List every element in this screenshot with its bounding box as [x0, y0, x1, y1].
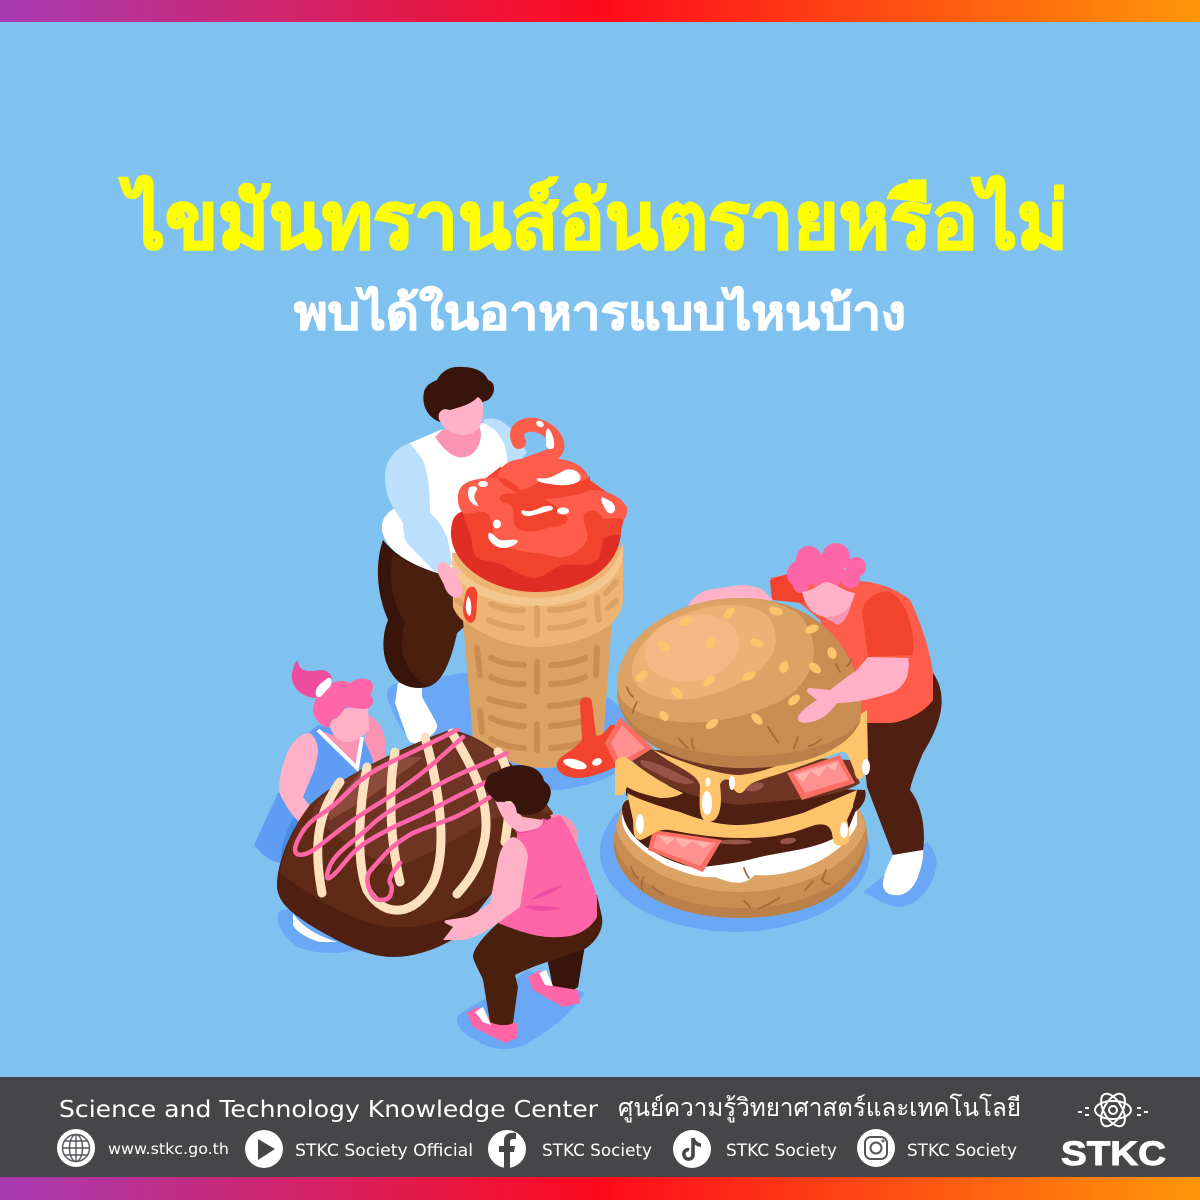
title: ไขมันทรานส์อันตรายหรือไม่: [119, 175, 1068, 265]
ice cream swirl tail: [517, 425, 557, 467]
brownie top: [313, 732, 553, 865]
organisation name English: Science and Technology Knowledge Center: [59, 1097, 599, 1123]
shirt: [770, 575, 933, 723]
shoe: [883, 850, 923, 895]
white sauce: [622, 810, 857, 883]
patty highlights: [640, 760, 796, 845]
logo wordmark: STKC: [1061, 1135, 1166, 1173]
footer panel: [0, 1077, 1200, 1177]
top bun: [617, 598, 861, 768]
ice cream top layer: [458, 457, 627, 557]
person: man behind ice cream: [378, 367, 527, 743]
dress: [290, 725, 375, 810]
organisation name Thai: ศูนย์ความรู้วิทยาศาสตร์และเทคโนโลยี: [618, 1093, 1021, 1123]
icon: facebook: [488, 1130, 526, 1168]
cone body: [463, 620, 612, 768]
ice cream swirl shading: [498, 476, 590, 531]
Facebook label: STKC Society: [542, 1141, 652, 1160]
hair: [313, 679, 373, 728]
icon: tiktok: [673, 1130, 711, 1168]
ponytail: [292, 660, 332, 698]
front shoe: [467, 1007, 517, 1043]
trousers: [860, 673, 942, 855]
hair: [787, 543, 866, 593]
sauce drip on cone: [463, 587, 477, 623]
shirt shading: [862, 592, 913, 657]
face: [328, 705, 369, 742]
face: [439, 397, 483, 435]
lower cheese: [627, 790, 857, 846]
subtitle: พบได้ในอาหารแบบไหนบ้าง: [294, 285, 906, 339]
face: [495, 800, 543, 832]
scrunchie: [316, 678, 332, 697]
cone rim highlight: [452, 540, 623, 606]
neck: [815, 598, 853, 625]
hair: [423, 367, 494, 422]
logo atom mark: [1078, 1090, 1148, 1130]
sesame seeds: [634, 605, 838, 731]
STKC logo: [1061, 1090, 1166, 1173]
website: www.stkc.go.th: [108, 1140, 229, 1158]
shoe: [395, 683, 437, 743]
arm: [443, 837, 528, 940]
icon: instagram: [857, 1129, 895, 1167]
chest: [318, 730, 362, 768]
bacon: [605, 717, 855, 872]
back leg: [547, 945, 585, 991]
Instagram label: STKC Society: [907, 1141, 1017, 1160]
trousers: [473, 895, 602, 1025]
arm: [279, 733, 318, 823]
top patty: [628, 749, 860, 805]
upper patty: [626, 775, 866, 828]
upper cheese left: [615, 757, 683, 798]
woman with burger (behind bun): [688, 543, 942, 895]
trousers: [378, 540, 470, 688]
icon: globe: [57, 1129, 95, 1167]
ice cream middle layer: [458, 467, 627, 578]
top gradient bar: [0, 0, 1200, 22]
white shirt: [382, 423, 520, 575]
melted sauce puddle: [557, 697, 625, 778]
TikTok label: STKC Society: [726, 1141, 837, 1160]
back shoe: [528, 970, 580, 1007]
ice cream base: [451, 505, 621, 592]
skirt: [254, 790, 330, 864]
bun grain marks: [627, 659, 851, 909]
pink shirt: [498, 815, 597, 937]
neck: [435, 424, 481, 457]
person: woman carrying brownie: [443, 765, 602, 1043]
waffle marks: [457, 582, 616, 635]
giant burger: [605, 598, 909, 918]
ice cream highlights: [468, 419, 615, 548]
back arm: [688, 585, 773, 612]
cream drizzle: [318, 733, 510, 910]
upper cheese: [653, 710, 868, 822]
shirt folds: [524, 885, 563, 911]
far shoulder: [360, 715, 386, 770]
brownie highlight: [327, 757, 423, 820]
far sleeve: [483, 418, 527, 480]
cone rim band: [452, 547, 623, 647]
brownie front face: [280, 730, 553, 927]
man's hand: [437, 562, 463, 598]
ice cream cone: [437, 419, 627, 768]
person: girl with pink ponytail: [254, 660, 386, 864]
bottom bun: [614, 805, 867, 918]
girl's white foot: [293, 913, 337, 942]
floor shadows: [277, 673, 937, 1049]
sleeve: [385, 443, 452, 572]
woman's front arm: [798, 657, 909, 723]
neckline: [318, 730, 362, 768]
pink drizzle: [295, 730, 507, 900]
hair: [485, 765, 551, 815]
face: [802, 582, 855, 617]
far shoulder: [550, 814, 578, 850]
icon: play: [245, 1130, 283, 1168]
lower patty: [622, 799, 860, 868]
footer background: [0, 1077, 1200, 1177]
brownie lower side: [277, 730, 553, 957]
neck collar: [515, 818, 547, 833]
illustration: people and giant foods: [254, 367, 942, 1049]
chocolate brownie: [277, 730, 553, 957]
YouTube label: STKC Society Official: [295, 1141, 473, 1160]
cheese drip highlights: [636, 759, 870, 838]
bottom gradient bar: [0, 1177, 1200, 1200]
